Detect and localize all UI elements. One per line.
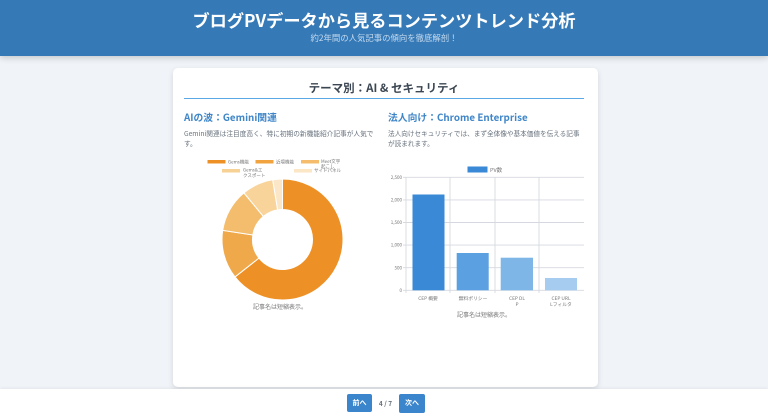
y axis labels: 1,500	[391, 220, 402, 226]
donut rings	[222, 179, 343, 300]
y axis labels: 2,500	[391, 175, 402, 181]
bar chart	[391, 166, 584, 319]
button: next	[399, 394, 425, 413]
donut legend: Gems機能	[228, 158, 249, 166]
text: Gemini description	[184, 128, 373, 148]
text: Gemini description: Gemini関連は注目度高く、特に初期の新機能紹介記事が人気で	[184, 128, 373, 138]
x axis labels	[418, 295, 572, 308]
donut legend: 起こし	[321, 164, 335, 170]
donut legend: 近境機能	[276, 158, 294, 166]
x axis labels: Lフィルタ	[550, 301, 572, 308]
x axis labels: 無料ポリシー	[459, 295, 488, 302]
y axis labels: 500	[394, 265, 402, 271]
bar legend	[468, 166, 503, 174]
y axis labels	[391, 175, 402, 294]
x axis labels: CEP 概要	[418, 295, 438, 302]
card heading: テーマ別：AI & セキュリティ	[309, 80, 459, 96]
donut legend: サイドパネル	[314, 168, 341, 174]
bar note: 記事名は短縮表示。	[457, 310, 511, 319]
bar legend: PV数	[490, 166, 503, 174]
heading: Chrome Enterprise: 法人向け：Chrome Enterprise	[388, 110, 528, 124]
button: previous: 前へ	[352, 398, 366, 408]
x axis labels: CEP URL	[551, 295, 571, 302]
y axis labels: 0	[400, 288, 402, 294]
donut legend	[208, 158, 341, 179]
text: Chrome Enterprise description: 法人向けセキュリティでは、まず全体像や基本価値を伝える記事	[388, 128, 580, 138]
bars	[412, 194, 577, 290]
panel: main card	[173, 68, 598, 387]
card heading	[184, 78, 584, 99]
button: next: 次へ	[405, 398, 419, 408]
page indicator: 4 / 7	[379, 398, 392, 408]
y axis labels: 2,000	[391, 198, 402, 204]
donut legend: クスポート	[243, 172, 265, 179]
donut legend: Gems&エ	[243, 168, 263, 174]
y axis labels: 1,000	[391, 243, 402, 249]
button: previous	[347, 394, 372, 412]
text: Gemini description: す。	[184, 138, 197, 148]
x axis labels: P	[515, 301, 519, 308]
donut note: 記事名は短縮表示。	[253, 302, 307, 311]
x axis labels: CEP DL	[509, 295, 525, 302]
text: Chrome Enterprise description	[388, 128, 580, 148]
title: ブログPVデータから見るコンテンツトレンド分析	[192, 7, 576, 32]
subtitle: 約2年間の人気記事の傾向を徹底解剖！	[310, 32, 458, 44]
text: Chrome Enterprise description: が読まれます。	[388, 138, 434, 148]
footer navigation	[0, 389, 768, 416]
heading: Gemini: AIの波：Gemini関連	[184, 110, 277, 124]
donut legend: Meet文字	[321, 158, 341, 165]
header banner	[0, 0, 768, 56]
